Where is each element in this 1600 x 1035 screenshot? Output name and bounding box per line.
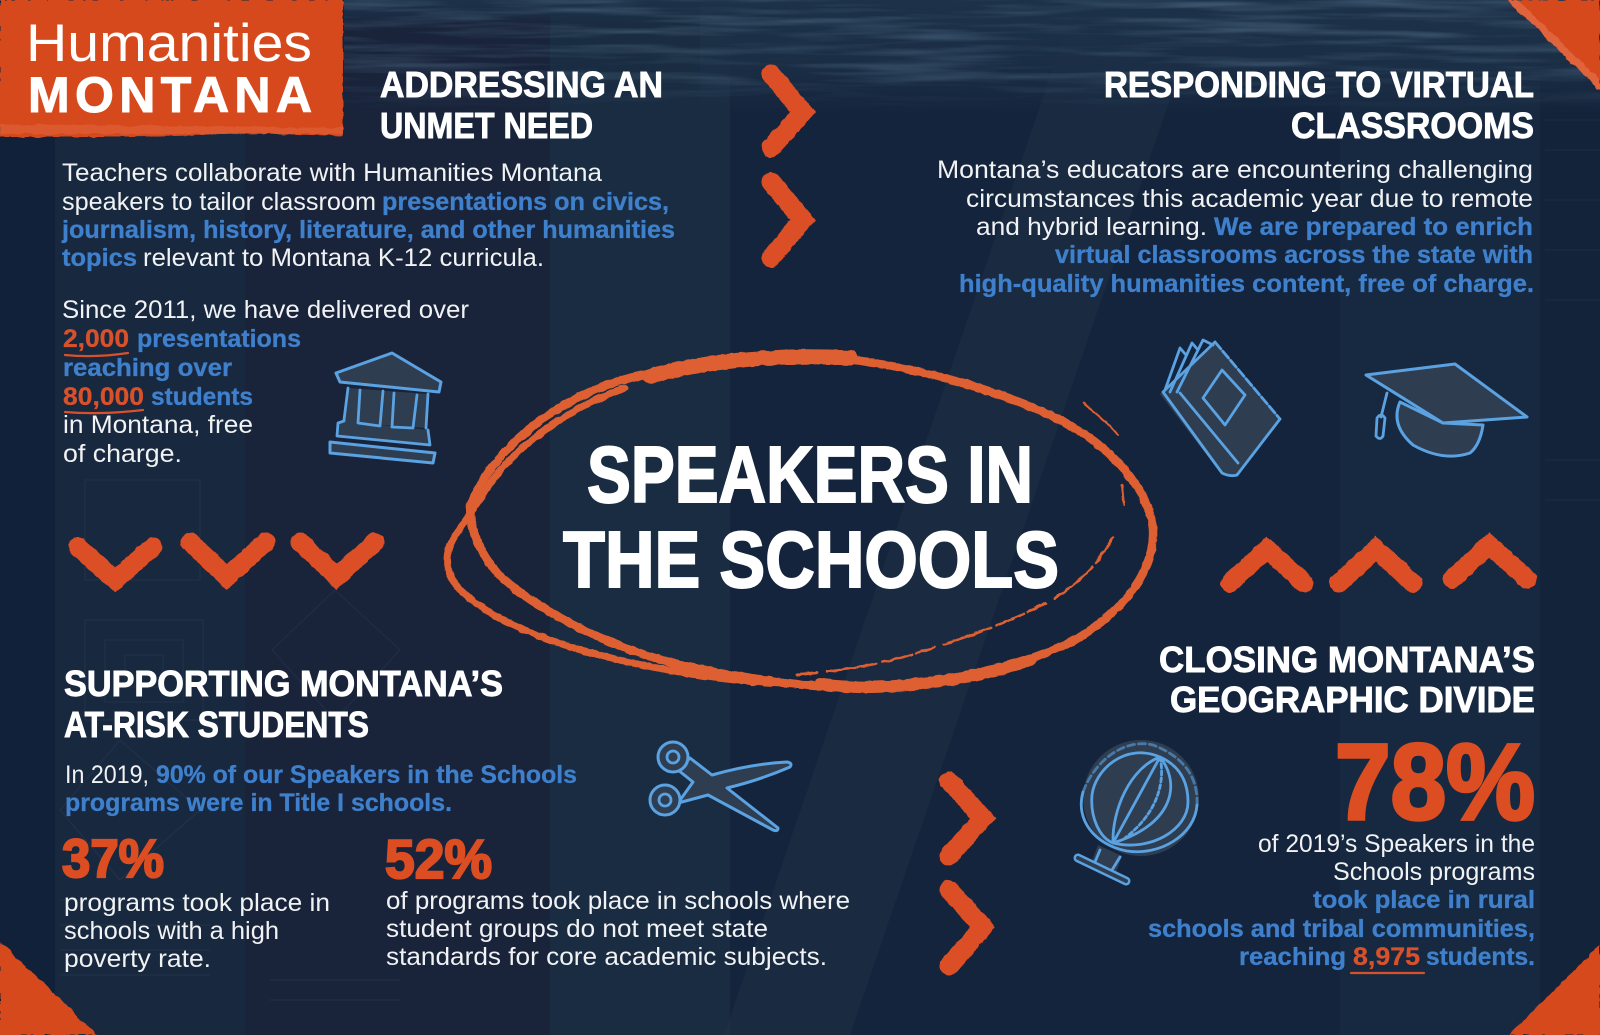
text block: We are prepared to enrich [1214,213,1533,241]
text block [937,156,1534,298]
stat: 52%: standards for core academic subjects. [386,943,827,971]
title oval [447,356,1153,688]
icon: globe [1078,740,1199,881]
text block: and hybrid learning. [976,213,1207,241]
logo: Humanities Montana: MONTANA [28,67,312,123]
heading: CLOSING MONTANA’S [1159,639,1535,680]
stat: 52%: student groups do not meet state [386,915,768,943]
stat: 37% [62,829,330,973]
text block: title I: programs were in Title I schools. [65,789,452,817]
text block: high-quality humanities content, free of charge. [959,270,1534,298]
corner: bottom left [0,942,97,1035]
stat: 52%: 52% [385,828,492,890]
text block: teachers: topics [62,244,137,272]
heading [64,663,503,745]
text block: Montana’s educators are encountering challenging [937,156,1533,184]
title: speakers in the schools: SPEAKERS IN [587,430,1033,519]
heading: SUPPORTING MONTANA’S [64,663,503,704]
text block: teachers: relevant to Montana K-12 curricula. [143,244,544,272]
text block: teachers: Teachers collaborate with Humanities Montana [62,159,602,187]
text block: virtual classrooms across the state with [1055,241,1533,269]
heading: AT-RISK STUDENTS [64,704,369,745]
text block: since 2011: reaching over [63,354,232,382]
title: speakers in the schools [563,430,1059,604]
stat: 78%: 78% [1335,721,1535,842]
arrows: bottom right-pointing chevrons [949,781,983,966]
arrows: down chevrons [78,542,375,580]
heading [380,64,663,146]
icon: bank building [330,353,441,463]
text block: of 2019’s Speakers in the [1258,830,1535,858]
heading: GEOGRAPHIC DIVIDE [1170,679,1535,720]
text block: teachers [61,159,675,272]
icon: book [1160,340,1280,477]
logo: Humanities Montana [0,0,343,137]
text block: title I [65,761,577,817]
corner: bottom right [1509,945,1600,1035]
text block: since 2011 [62,296,469,468]
text block: since 2011: 2,000 [63,325,129,353]
text block: since 2011: in Montana, free [63,411,253,439]
panel: closing geographic divide [1148,639,1535,973]
heading: CLASSROOMS [1291,105,1534,146]
text block: title I: In 2019, [65,761,149,789]
stat: 37%: poverty rate. [64,945,211,973]
stat: 52% [385,828,850,971]
icon: scissors [650,742,791,831]
text block: circumstances this academic year due to remote [966,185,1533,213]
text block: teachers: journalism, history, literature, and other humanities [61,216,675,244]
heading: ADDRESSING AN [380,64,663,105]
text block: since 2011: presentations [137,325,301,353]
heading [1104,64,1534,146]
text block: students. [1426,943,1535,971]
text block [1148,830,1535,973]
text block: teachers: presentations on civics, [382,188,669,216]
text block: Schools programs [1333,858,1535,886]
arrows: top right-pointing chevrons [771,74,803,258]
heading [1159,639,1535,720]
panel: responding to virtual classrooms [937,64,1534,298]
stat: 52%: of programs took place in schools where [386,887,850,915]
stat: 37%: schools with a high [64,917,279,945]
title: speakers in the schools: THE SCHOOLS [563,515,1059,604]
text block: took place in rural [1313,886,1535,914]
text block: 8,975 [1353,943,1420,971]
text block: title I: 90% of our Speakers in the Schools [156,761,577,789]
text block: since 2011: Since 2011, we have delivered over [62,296,469,324]
text block: since 2011: students [151,383,253,411]
corner: top right [1507,0,1600,90]
panel: supporting at-risk students [62,663,850,973]
icon: graduation cap [1366,364,1527,456]
text block: since 2011: of charge. [63,440,182,468]
heading: RESPONDING TO VIRTUAL [1104,64,1534,105]
heading: UNMET NEED [380,105,593,146]
text block: schools and tribal communities, [1148,915,1535,943]
stat: 37%: 37% [62,829,164,889]
text block: since 2011: 80,000 [63,383,144,411]
logo: Humanities Montana: Humanities [26,14,312,73]
panel: addressing an unmet need [61,64,675,468]
arrows: up chevrons [1230,545,1527,583]
stat: 37%: programs took place in [64,889,330,917]
text block: teachers: speakers to tailor classroom [62,188,376,216]
text block: reaching [1239,943,1346,971]
